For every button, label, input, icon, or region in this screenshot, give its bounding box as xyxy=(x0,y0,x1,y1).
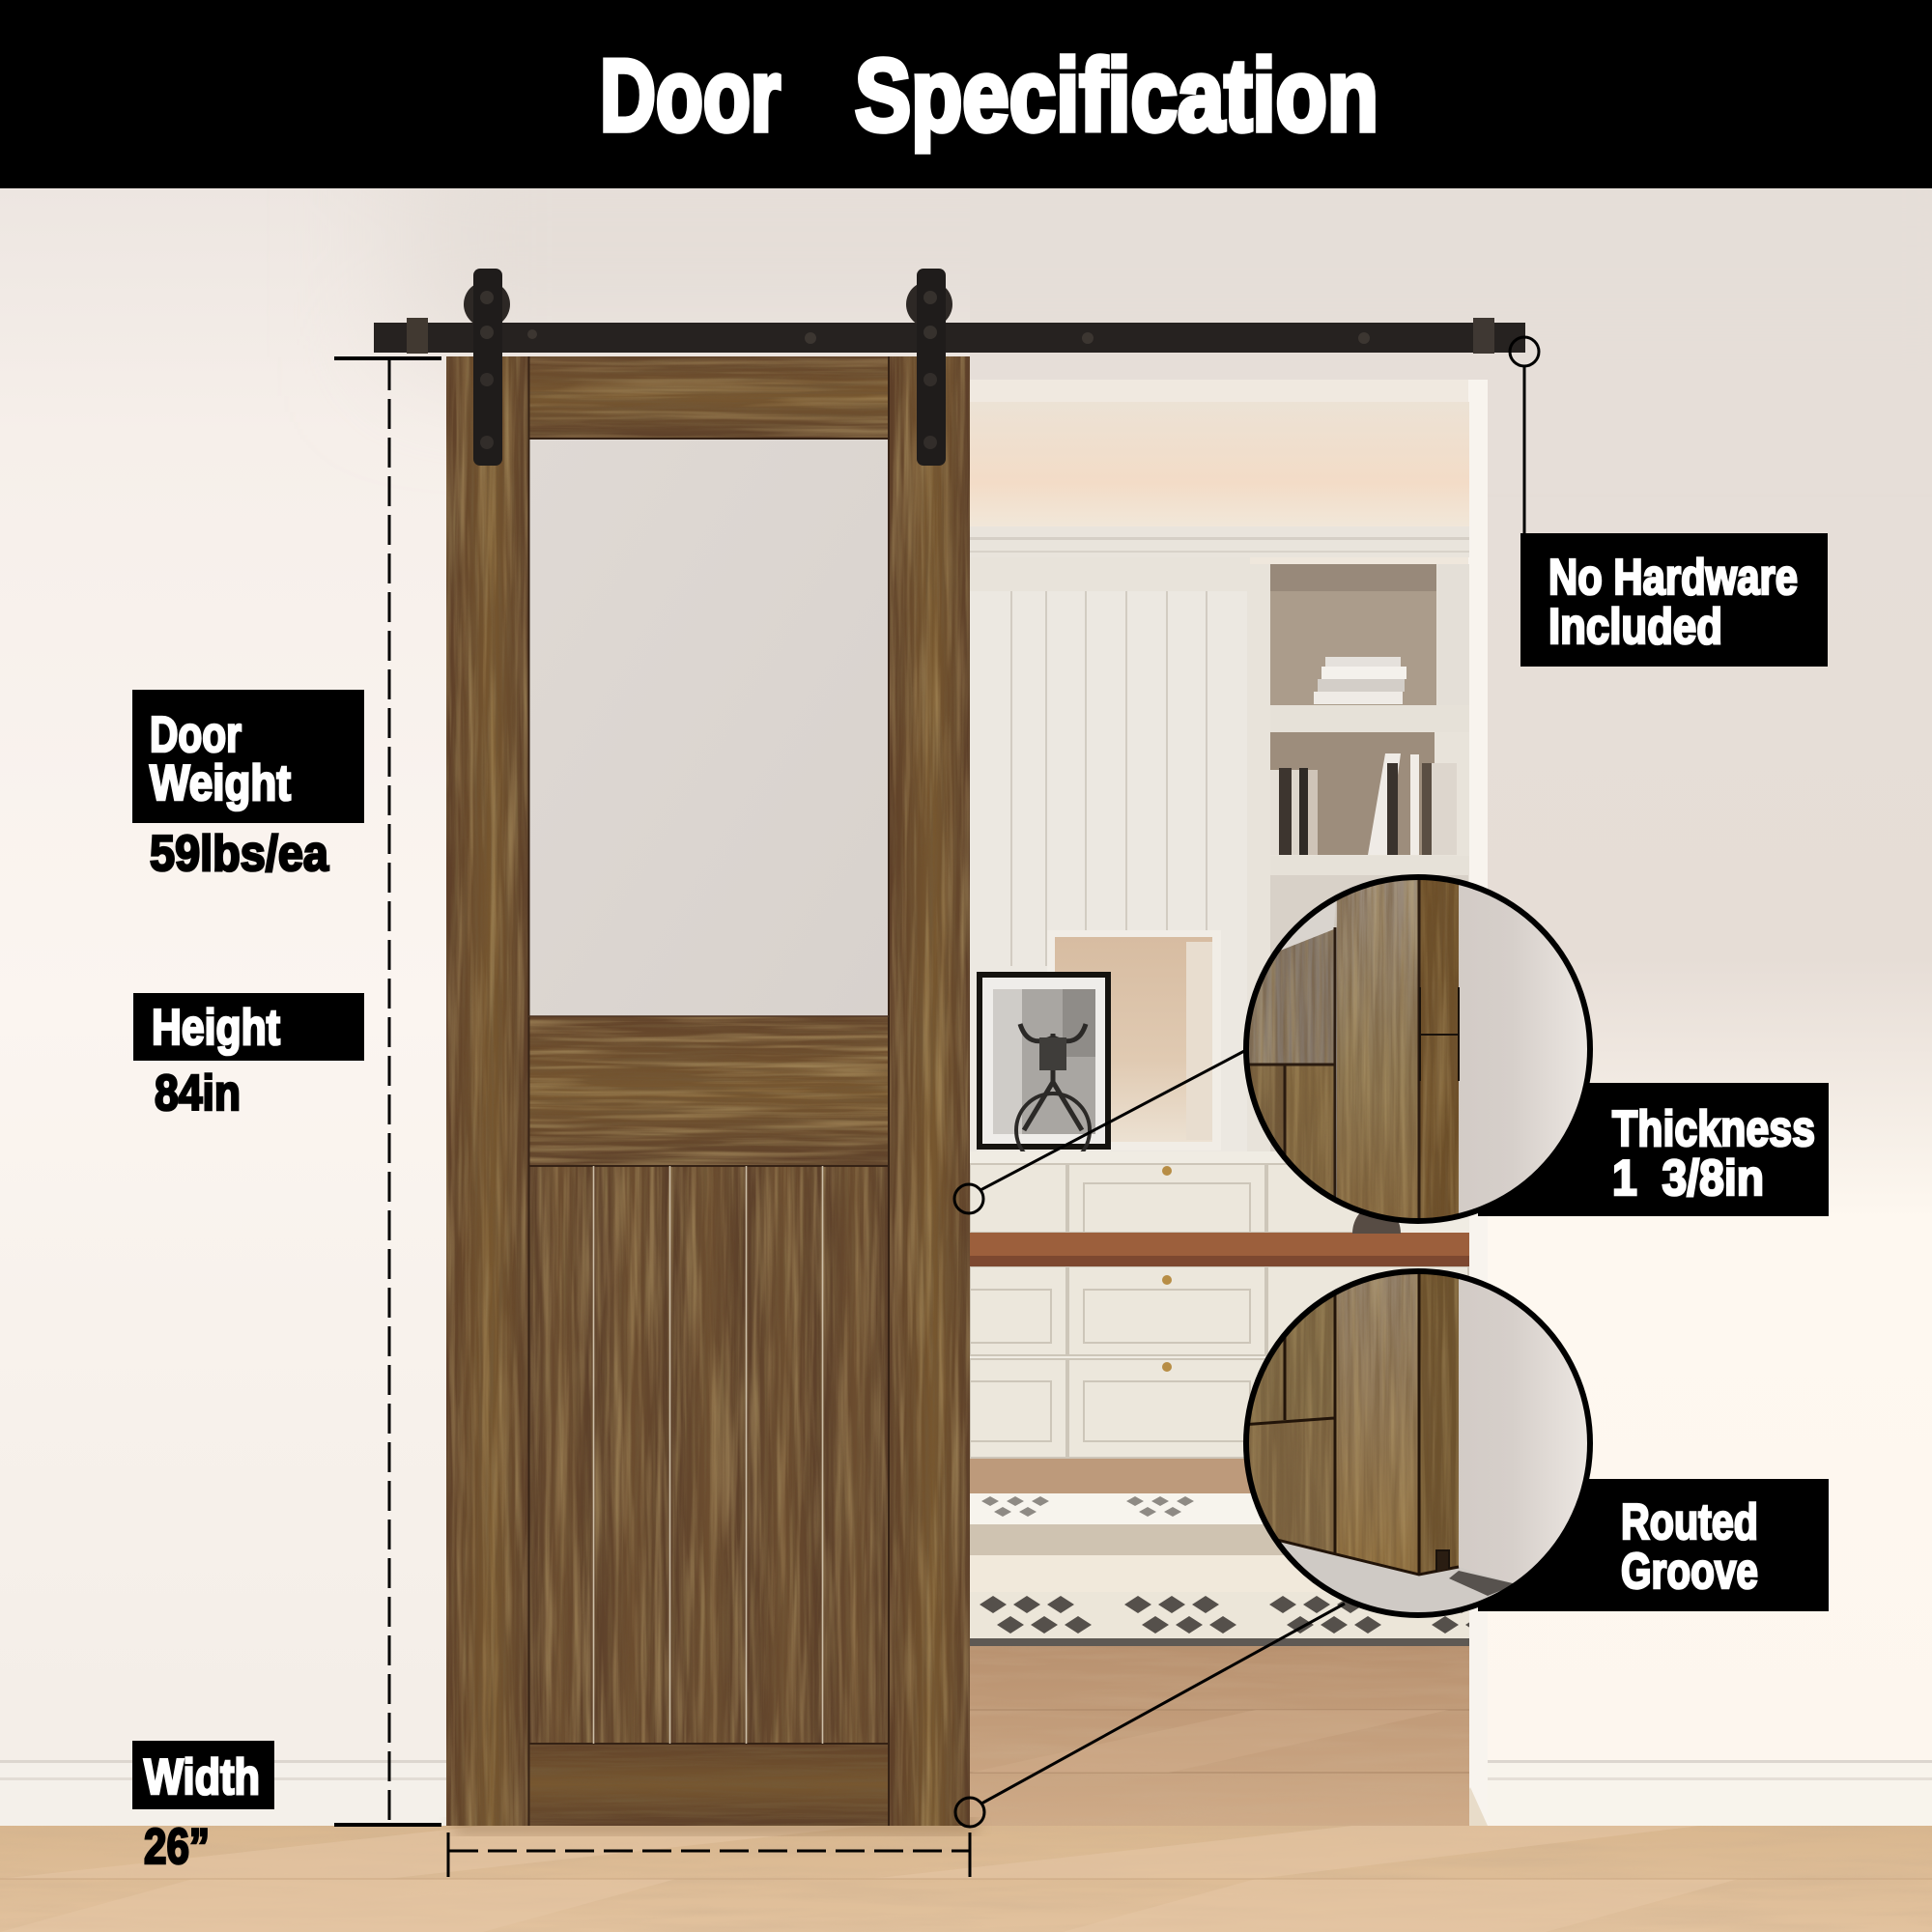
barn door xyxy=(446,356,976,1833)
room ceiling xyxy=(970,402,1469,526)
cabinets xyxy=(970,1151,1469,1459)
label: height: 84in xyxy=(155,1065,241,1122)
label: no hardware included: Included xyxy=(1548,599,1722,655)
door seams xyxy=(528,356,889,1826)
label: thickness background xyxy=(1478,1083,1829,1216)
callout leader: thickness xyxy=(954,1050,1246,1213)
label: width: Width xyxy=(144,1749,260,1805)
detail circle: door edge thickness xyxy=(1236,869,1604,1236)
door frame xyxy=(970,380,1488,1826)
doorway and room xyxy=(970,380,1488,1826)
baseboard xyxy=(0,1760,1932,1826)
title text xyxy=(600,39,1378,153)
label: thickness text xyxy=(1612,1101,1815,1207)
panelled wall xyxy=(970,557,1250,1156)
label: width: 26” xyxy=(144,1819,210,1875)
glass pane xyxy=(528,439,889,1018)
label: routed groove text xyxy=(1621,1494,1758,1600)
label: routed groove text: Routed xyxy=(1621,1494,1758,1550)
detail circle: routed groove xyxy=(1236,1265,1604,1633)
callout leader: hardware xyxy=(1510,337,1539,533)
floor xyxy=(0,1826,1932,1932)
title banner xyxy=(0,0,1932,188)
label: thickness text: Thickness xyxy=(1612,1101,1815,1157)
label: width xyxy=(132,1741,274,1875)
label: routed groove background xyxy=(1478,1479,1829,1611)
room floor and rug xyxy=(970,1459,1469,1826)
label: no hardware included: No Hardware xyxy=(1548,550,1798,606)
label: routed groove text: Groove xyxy=(1621,1544,1758,1600)
stack of books xyxy=(1314,657,1406,704)
label: thickness text: 1 3/8in xyxy=(1612,1151,1764,1207)
label: door weight: Weight xyxy=(150,755,291,811)
crown moulding xyxy=(970,526,1469,557)
width dimension line xyxy=(448,1833,970,1877)
label: door weight: 59lbs/ea xyxy=(150,826,329,882)
title text: Door xyxy=(600,39,781,153)
callout leader: routed groove xyxy=(955,1604,1345,1827)
wooden table top xyxy=(970,1205,1469,1266)
sliding track rail xyxy=(374,318,1525,354)
door stiles and planks xyxy=(446,356,970,1826)
label: door weight: Door xyxy=(150,707,242,763)
large artwork xyxy=(1047,930,1221,1151)
hanger strap left xyxy=(464,269,510,466)
label: no hardware included xyxy=(1520,533,1828,667)
bicycle photo xyxy=(977,972,1111,1167)
label: door weight xyxy=(132,690,364,882)
door contact shadow xyxy=(454,1820,976,1833)
hanger strap right xyxy=(906,269,952,466)
books on shelf xyxy=(1270,753,1457,855)
label: height: Height xyxy=(152,1000,280,1056)
label: height xyxy=(133,993,364,1122)
title text: Specification xyxy=(855,39,1378,153)
door cross rails xyxy=(528,356,889,1826)
height dimension line xyxy=(334,358,441,1825)
bookcase xyxy=(1247,564,1469,1155)
